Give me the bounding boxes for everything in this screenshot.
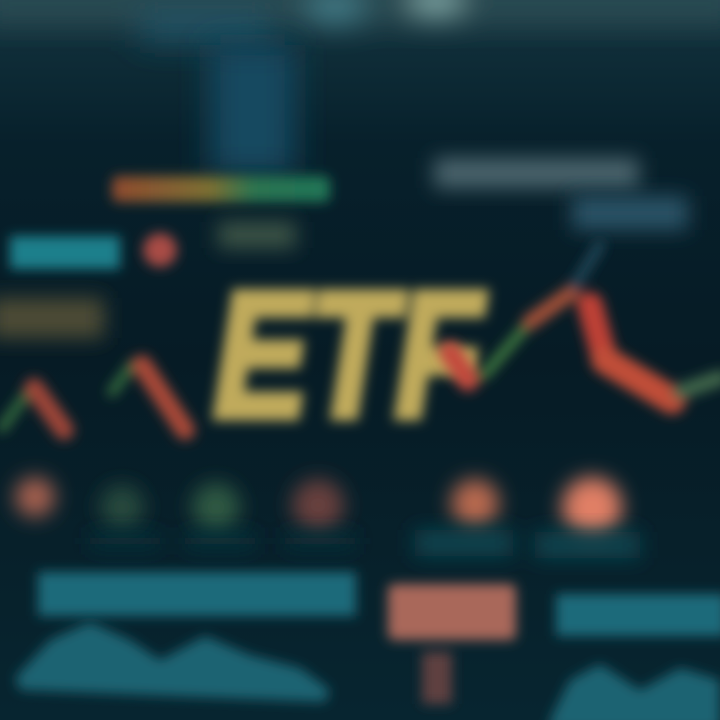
teal mountains left bbox=[15, 622, 330, 702]
candlestick line right bbox=[450, 245, 720, 400]
top glow bbox=[0, 0, 720, 42]
teal mountains right bbox=[550, 664, 720, 720]
sub header text bbox=[572, 196, 688, 230]
teal label bbox=[10, 236, 120, 269]
header text bbox=[434, 158, 639, 188]
candlestick line left bbox=[2, 365, 185, 430]
icon labels bbox=[90, 530, 640, 558]
header bar bbox=[112, 176, 330, 202]
ETF title: ETF bbox=[214, 255, 485, 454]
row of circle icons bbox=[15, 477, 622, 537]
tower glow bbox=[210, 45, 295, 175]
pink block bbox=[388, 584, 516, 704]
teal band left bbox=[38, 572, 356, 616]
red marker bbox=[143, 233, 177, 267]
left olive block bbox=[0, 298, 104, 338]
olive label bbox=[218, 222, 296, 248]
teal band right bbox=[556, 594, 720, 636]
